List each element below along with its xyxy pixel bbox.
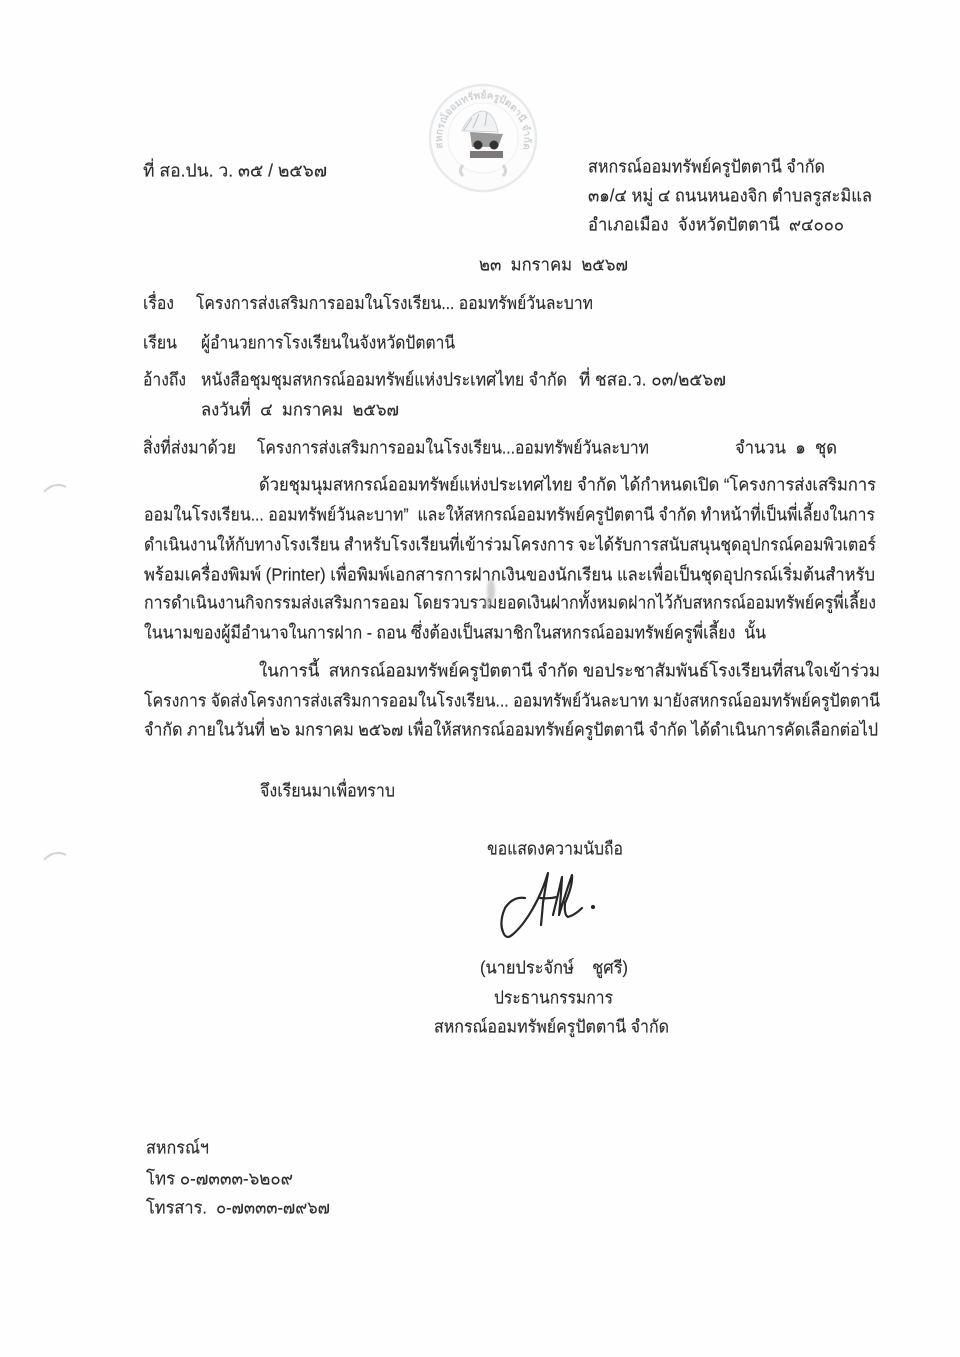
body paragraph 1: ในนามของผู้มีอำนาจในการฝาก - ถอน ซึ่งต้องเป็นสมาชิกในสหกรณ์ออมทรัพย์ครูพี่เลี้ยง นั้น [144, 620, 766, 644]
punch hole mark: lower [44, 853, 66, 860]
signatory: สหกรณ์ออมทรัพย์ครูปัตตานี จำกัด [434, 1016, 669, 1038]
signatory: ประธานกรรมการ [494, 988, 613, 1008]
reference number [143, 156, 880, 1218]
body paragraph 1: ด้วยชุมนุมสหกรณ์ออมทรัพย์แห่งประเทศไทย จำกัด ได้กำหนดเปิด “โครงการส่งเสริมการ [259, 474, 876, 496]
smudge on paper [485, 579, 495, 609]
closing line: จึงเรียนมาเพื่อทราบ [260, 778, 395, 800]
subject: เรื่อง [143, 291, 174, 313]
body paragraph 1 [144, 474, 876, 644]
reference: ที่ ชสอ.ว. ๐๓/๒๕๖๗ [579, 368, 726, 390]
body paragraph 2: โครงการ จัดส่งโครงการส่งเสริมการออมในโรงเรียน... ออมทรัพย์วันละบาท มายังสหกรณ์ออมทรัพย์ครูปัตตานี [144, 690, 880, 712]
addressee: เรียน [143, 332, 177, 352]
reference: อ้างถึง [143, 370, 186, 390]
body paragraph 2: ในการนี้ สหกรณ์ออมทรัพย์ครูปัตตานี จำกัด ขอประชาสัมพันธ์โรงเรียนที่สนใจเข้าร่วม [259, 658, 880, 682]
body paragraph 2 [144, 658, 880, 740]
sender address: อำเภอเมือง จังหวัดปัตตานี ๙๔๐๐๐ [588, 214, 844, 234]
reference: หนังสือชุมชุมสหกรณ์ออมทรัพย์แห่งประเทศไทย จำกัด [201, 370, 567, 390]
sender address [588, 156, 872, 234]
sender address: ๓๑/๔ หมู่ ๔ ถนนหนองจิก ตำบลรูสะมิแล [588, 186, 872, 206]
enclosure: จำนวน ๑ ชุด [735, 438, 837, 458]
reference: ลงวันที่ ๔ มกราคม ๒๕๖๗ [201, 398, 399, 420]
contact details: สหกรณ์ฯ [146, 1138, 209, 1158]
icon: organisation seal [428, 84, 538, 192]
signatory [434, 958, 669, 1038]
enclosure [143, 436, 837, 458]
icon: organisation seal: สหกรณ์ออมทรัพย์ครูปัตตานี จำกัด [436, 89, 532, 150]
body paragraph 2: จำกัด ภายในวันที่ ๒๖ มกราคม ๒๕๖๗ เพื่อให้สหกรณ์ออมทรัพย์ครูปัตตานี จำกัด ได้ดำเนินการคัดเลือกต่อไป [144, 718, 878, 740]
addressee: ผู้อำนวยการโรงเรียนในจังหวัดปัตตานี [201, 332, 455, 354]
date: ๒๓ มกราคม ๒๕๖๗ [479, 254, 628, 274]
contact details [146, 1138, 330, 1218]
enclosure: โครงการส่งเสริมการออมในโรงเรียน...ออมทรัพย์วันละบาท [257, 438, 649, 458]
body paragraph 1: พร้อมเครื่องพิมพ์ (Printer) เพื่อพิมพ์เอกสารการฝากเงินของนักเรียน และเพื่อเป็นชุดอุปกรณ์เริ่มต้นสำหรับ [144, 562, 875, 586]
body paragraph 1: ดำเนินงานให้กับทางโรงเรียน สำหรับโรงเรียนที่เข้าร่วมโครงการ จะได้รับการสนับสนุนชุดอุปกรณ์คอมพิวเตอร์ [144, 532, 876, 556]
icon: handwritten signature [501, 873, 594, 937]
reference [143, 368, 726, 420]
subject: โครงการส่งเสริมการออมในโรงเรียน... ออมทรัพย์วันละบาท [196, 293, 593, 313]
body paragraph 1: ออมในโรงเรียน... ออมทรัพย์วันละบาท” และให้สหกรณ์ออมทรัพย์ครูปัตตานี จำกัด ทำหน้าที่เป็นพี่เลี้ยงในการ [144, 502, 875, 526]
contact details: โทร ๐-๗๓๓๓-๖๒๐๙ [146, 1168, 293, 1188]
enclosure: สิ่งที่ส่งมาด้วย [143, 436, 236, 458]
reference number: ที่ สอ.ปน. ว. ๓๕ / ๒๕๖๗ [143, 158, 327, 180]
contact details: โทรสาร. ๐-๗๓๓๓-๗๙๖๗ [146, 1198, 330, 1218]
body paragraph 1: การดำเนินงานกิจกรรมส่งเสริมการออม โดยรวบรวมยอดเงินฝากทั้งหมดฝากไว้กับสหกรณ์ออมทรัพย์ครูพี่เลี้ยง [144, 590, 876, 614]
signatory: (นายประจักษ์ ชูศรี) [480, 958, 628, 978]
salutation: ขอแสดงความนับถือ [487, 838, 623, 858]
punch hole mark: upper [44, 485, 66, 492]
sender address: สหกรณ์ออมทรัพย์ครูปัตตานี จำกัด [588, 156, 825, 178]
